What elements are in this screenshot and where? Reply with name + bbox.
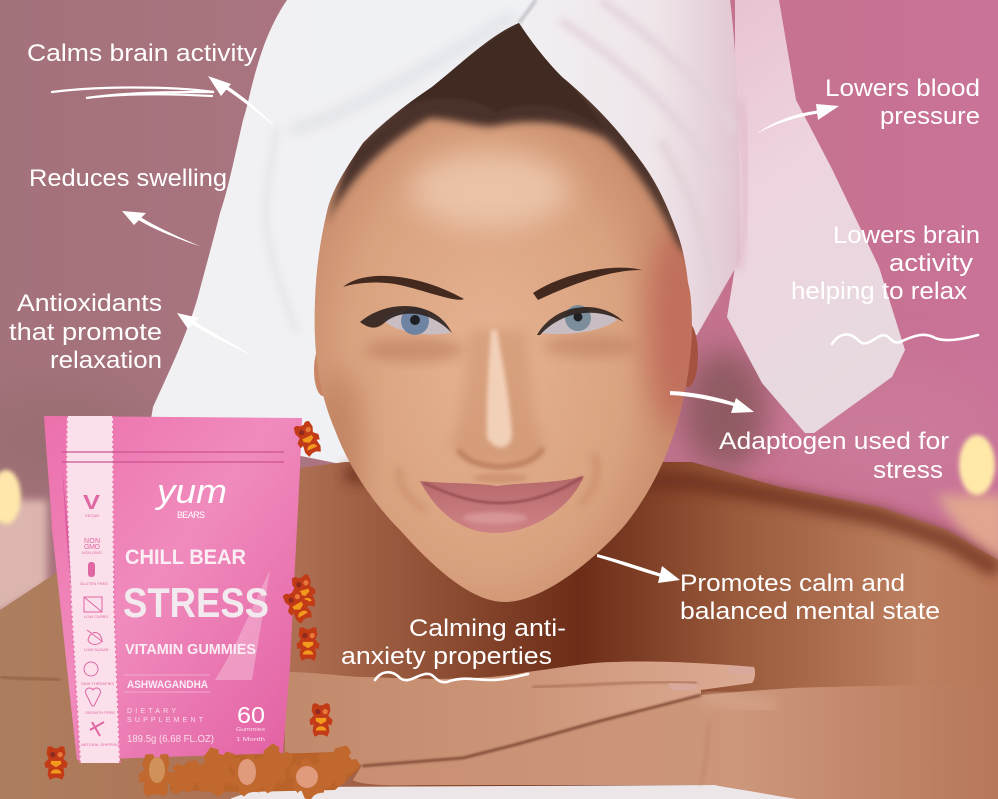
side icons: GLUTEN FREE bbox=[80, 581, 108, 586]
gummies count: Gummies bbox=[236, 727, 266, 733]
product title: STRESS bbox=[123, 579, 269, 626]
right eye bbox=[537, 305, 624, 335]
callout: antioxidants bbox=[9, 290, 162, 374]
side icons: LOW CARBS bbox=[84, 614, 108, 619]
gummies count bbox=[236, 702, 266, 743]
side icons: V bbox=[83, 492, 101, 514]
side icons: SKIN THERAPIES bbox=[81, 681, 114, 686]
hand bbox=[285, 661, 755, 770]
callout: lowers blood pressure bbox=[825, 75, 980, 130]
callout: promotes calm bbox=[680, 570, 940, 625]
callout: adaptogen bbox=[719, 428, 949, 484]
candle left bbox=[0, 470, 47, 612]
lips bbox=[420, 476, 584, 533]
supplement label bbox=[127, 708, 204, 724]
left eyebrow bbox=[343, 276, 464, 300]
towel tail bbox=[727, 0, 905, 433]
callout: antioxidants: relaxation bbox=[50, 347, 162, 374]
supplement label: DIETARY bbox=[127, 708, 176, 715]
callout: lowers blood pressure: Lowers blood bbox=[825, 75, 980, 102]
towel left lobe bbox=[150, 0, 536, 465]
side icons: GMO bbox=[84, 544, 101, 551]
net weight: 189.5g (6.68 FL.OZ) bbox=[127, 734, 214, 745]
hair bbox=[326, 18, 695, 260]
side icons: NON bbox=[84, 538, 100, 545]
callout: calming anti-anxiety: Calming anti- bbox=[409, 615, 566, 642]
jaw shadow bbox=[322, 371, 370, 484]
pouch strip zigzag edges bbox=[66, 416, 120, 763]
arrow: promotes calm bbox=[597, 554, 680, 583]
left arm line bbox=[0, 677, 60, 680]
right ear bbox=[678, 323, 698, 387]
smile lines bbox=[399, 453, 597, 510]
callout: calming anti-anxiety bbox=[341, 615, 566, 670]
left eye bbox=[360, 306, 452, 335]
callout: promotes calm: Promotes calm and bbox=[680, 570, 905, 597]
callout: lowers brain activity: helping to relax bbox=[791, 278, 967, 305]
arrow: calms brain activity bbox=[208, 76, 276, 128]
candle right bbox=[935, 435, 998, 570]
callout: lowers brain activity: activity bbox=[889, 250, 973, 277]
side icons bbox=[80, 492, 119, 747]
callout: antioxidants: Antioxidants bbox=[17, 290, 162, 317]
background glow bbox=[0, 350, 998, 490]
pouch sheen bbox=[215, 570, 270, 680]
callout: calming anti-anxiety: anxiety properties bbox=[341, 643, 552, 670]
callout: adaptogen: stress bbox=[873, 457, 943, 484]
body and shoulders bbox=[0, 462, 998, 799]
gummy bears floating bbox=[44, 419, 333, 780]
pouch left fold bbox=[62, 465, 72, 600]
ingredient: ASHWAGANDHA bbox=[127, 679, 208, 691]
gummies count: 1 Month bbox=[236, 737, 265, 743]
face bbox=[300, 18, 705, 610]
side icons: LOW SUGAR bbox=[84, 647, 109, 652]
callout: lowers brain activity: Lowers brain bbox=[833, 222, 980, 249]
squiggle: calming anti-anxiety bbox=[375, 672, 528, 682]
gummy bears pile bbox=[138, 739, 364, 799]
side icons: NON-GMO bbox=[82, 550, 102, 555]
under-eye shadows bbox=[365, 338, 465, 362]
callout: adaptogen: Adaptogen used for bbox=[719, 428, 949, 455]
brand logo: yum bbox=[155, 473, 227, 511]
pouch side strip bbox=[66, 416, 120, 763]
forehead highlight bbox=[410, 152, 570, 228]
side icons: VEGAN bbox=[85, 513, 99, 518]
arrow: antioxidants bbox=[177, 313, 253, 356]
arrow: adaptogen bbox=[670, 391, 754, 413]
brand logo: BEARS bbox=[177, 510, 205, 520]
cheek blush right bbox=[645, 230, 705, 430]
right eyebrow bbox=[533, 268, 642, 300]
nose bbox=[450, 330, 545, 483]
side icons: NATURAL SHIPPING bbox=[81, 742, 119, 747]
callout: calms brain activity: Calms brain activity bbox=[27, 40, 257, 67]
ingredient bbox=[124, 675, 210, 692]
callout: promotes calm: balanced mental state bbox=[680, 598, 940, 625]
callout: antioxidants: that promote bbox=[9, 319, 162, 346]
callouts bbox=[9, 40, 980, 670]
bottom towel bbox=[230, 785, 800, 799]
arrow: lowers blood pressure bbox=[756, 104, 839, 134]
arrow: reduces swelling bbox=[122, 211, 202, 247]
towel folds bbox=[265, 0, 746, 333]
callout: lowers brain activity bbox=[791, 222, 980, 305]
product name: CHILL BEAR bbox=[125, 546, 246, 569]
supplement label: SUPPLEMENT bbox=[127, 717, 204, 724]
callout: lowers blood pressure: pressure bbox=[880, 103, 980, 130]
callout: reduces swelling: Reduces swelling bbox=[29, 165, 227, 192]
towel right lobe bbox=[500, 0, 740, 335]
towel wrap bbox=[150, 0, 905, 465]
squiggle: lowers brain activity bbox=[832, 334, 978, 344]
forearm bbox=[353, 683, 998, 799]
underline: calms brain activity bbox=[52, 88, 214, 98]
product subtitle: VITAMIN GUMMIES bbox=[125, 642, 256, 658]
product pouch bbox=[44, 416, 302, 763]
shoulder edge shadow bbox=[345, 474, 998, 570]
gummies count: 60 bbox=[237, 702, 265, 728]
side icons: GROWTH FREE bbox=[85, 710, 115, 715]
pouch zip bbox=[62, 452, 284, 462]
left ear bbox=[314, 344, 332, 396]
